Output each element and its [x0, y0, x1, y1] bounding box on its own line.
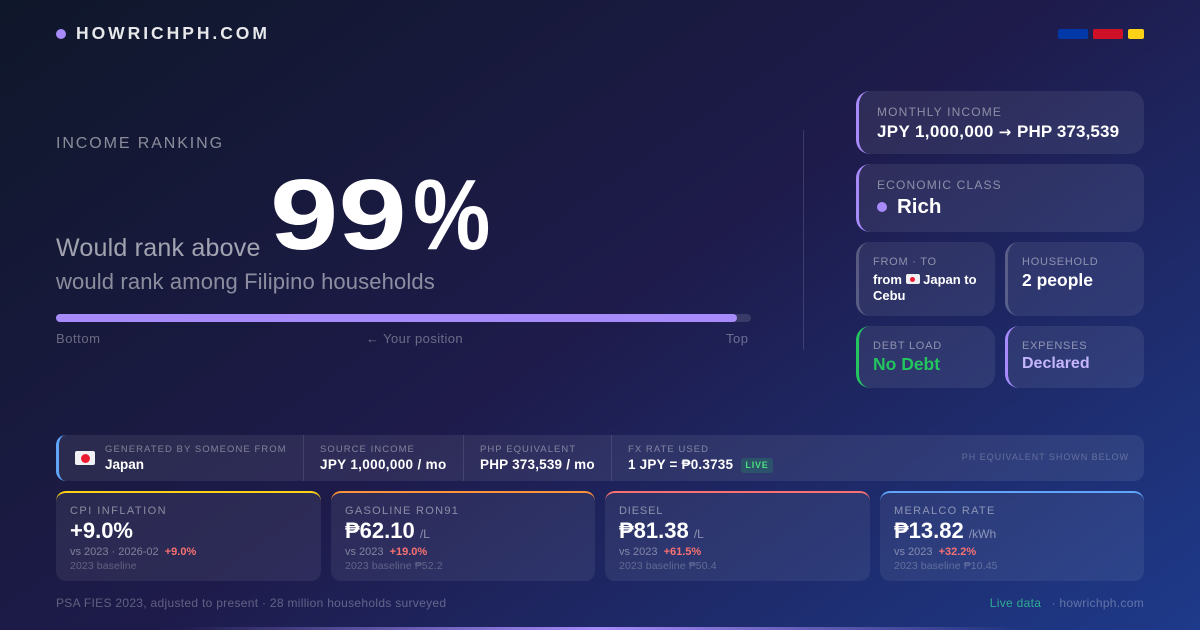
value: 2 people	[1022, 270, 1093, 290]
value	[873, 272, 977, 303]
strip item: generated by	[105, 444, 287, 472]
label: ECONOMIC CLASS	[877, 178, 1002, 192]
strip item: FX rate: 1 JPY = ₱0.3735	[628, 457, 733, 472]
baseline: 2023 baseline ₱52.2	[345, 560, 443, 572]
strip item: PHP equivalent	[480, 444, 595, 472]
value: ₱62.10 /L	[345, 518, 430, 543]
eyebrow label: INCOME RANKING	[56, 135, 224, 152]
progress bar	[56, 314, 751, 322]
strip item: FX rate	[628, 444, 773, 473]
panel: household	[1005, 242, 1144, 316]
big percentile number: 99	[270, 159, 407, 271]
footer source note: PSA FIES 2023, adjusted to present · 28 million households surveyed	[56, 596, 446, 610]
panel: debt load	[856, 326, 995, 388]
label: DEBT LOAD	[873, 340, 942, 352]
label: DIESEL	[619, 505, 663, 517]
value: No Debt	[873, 354, 940, 374]
label: MONTHLY INCOME	[877, 105, 1002, 119]
comparison: vs 2023 · 2026-02 +9.0%	[70, 546, 196, 558]
strip item: source income	[320, 444, 447, 472]
panel: from and to	[856, 242, 995, 316]
panel: monthly income	[856, 91, 1144, 154]
live badge	[741, 458, 773, 473]
panel: economic class	[856, 164, 1144, 232]
strip item: PHP equivalent: PHP EQUIVALENT	[480, 444, 576, 455]
value: Rich	[897, 195, 941, 218]
comparison: vs 2023 +32.2%	[894, 546, 976, 558]
bar label: bottom: Bottom	[56, 331, 100, 346]
vertical divider	[803, 130, 804, 350]
brand header	[56, 23, 270, 43]
comparison: vs 2023 +61.5%	[619, 546, 701, 558]
brand dot	[56, 29, 66, 39]
panel: expenses	[1005, 326, 1144, 388]
stat: gasoline	[331, 491, 595, 581]
value: JPY 1,000,000 → PHP 373,539	[877, 122, 1119, 141]
lead-in text: Would rank above	[56, 234, 261, 262]
stat: diesel	[605, 491, 870, 581]
brand name: HOWRICHPH.COM	[76, 23, 270, 43]
stat: Meralco rate	[880, 491, 1144, 581]
value: ₱13.82 /kWh	[894, 518, 996, 543]
bottom glow line	[0, 627, 1200, 630]
baseline: 2023 baseline ₱10.45	[894, 560, 998, 572]
live badge: LIVE	[745, 460, 769, 470]
value: Declared	[1022, 355, 1090, 372]
strip item: source income: SOURCE INCOME	[320, 444, 415, 455]
big percentile number	[270, 159, 490, 271]
baseline: 2023 baseline	[70, 560, 137, 572]
bar label: your position: ← Your position	[366, 331, 463, 346]
bar label: top: Top	[726, 331, 748, 346]
label: EXPENSES	[1022, 340, 1087, 352]
icon: Japan flag	[75, 451, 95, 465]
label: MERALCO RATE	[894, 505, 996, 517]
strip item: PHP equivalent: PHP 373,539 / mo	[480, 457, 595, 472]
big percentile number: %	[413, 159, 490, 271]
strip item: FX rate: FX RATE USED	[628, 444, 709, 455]
value: +9.0%	[70, 518, 133, 543]
source strip	[56, 435, 1144, 481]
strip item: generated by: GENERATED BY SOMEONE FROM	[105, 444, 287, 455]
baseline: 2023 baseline ₱50.4	[619, 560, 717, 572]
label: HOUSEHOLD	[1022, 256, 1098, 268]
label: GASOLINE RON91	[345, 505, 459, 517]
strip item: source income: JPY 1,000,000 / mo	[320, 457, 447, 472]
comparison: vs 2023 +19.0%	[345, 546, 427, 558]
sub text: would rank among Filipino households	[56, 269, 435, 294]
value: ₱81.38 /L	[619, 518, 704, 543]
footer right: Live data · howrichph.com	[990, 596, 1144, 610]
strip note: PH EQUIVALENT SHOWN BELOW	[962, 452, 1129, 462]
label: CPI INFLATION	[70, 505, 167, 517]
hero: income ranking	[56, 135, 751, 346]
Philippine flag colour bars	[1058, 29, 1144, 39]
class dot	[877, 202, 887, 212]
label: FROM · TO	[873, 256, 937, 268]
stat: CPI inflation	[56, 491, 321, 581]
dividers	[303, 435, 304, 481]
value: Cebu	[873, 288, 906, 303]
value: from Japan to	[873, 272, 977, 287]
strip item: generated by: Japan	[105, 457, 144, 472]
